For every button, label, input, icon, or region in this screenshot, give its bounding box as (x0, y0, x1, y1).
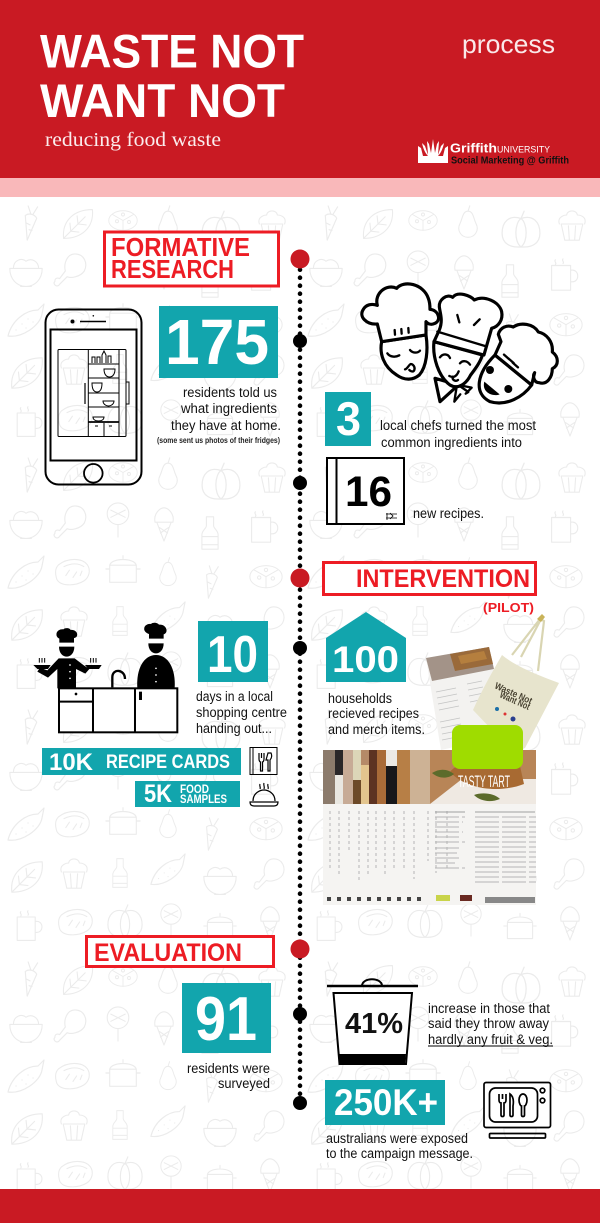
stat: 250K+ australians: 250K+ (334, 1082, 438, 1123)
heading: evaluation: EVALUATION (94, 939, 242, 967)
stat: 16 recipes book: new recipes. (413, 506, 484, 521)
icon: tv with cutlery (484, 1082, 550, 1138)
stat: 10 days: shopping centre (196, 705, 287, 720)
footer banner (0, 1189, 600, 1223)
recipe photo and sheet (323, 750, 536, 905)
stat: 10 days: 10 (207, 626, 258, 684)
header banner (0, 0, 600, 197)
merch photo: recipe card, tote bag, green board (323, 614, 559, 905)
icon: chefs at kitchen counter (33, 623, 177, 732)
tote bag: Waste Not (493, 681, 534, 707)
stat: 250K+ australians: to the campaign message. (326, 1146, 473, 1161)
stat: 3 chefs: local chefs turned the most (380, 418, 536, 433)
text: increase fruit and veg: hardly any fruit & veg. (428, 1032, 553, 1047)
text: increase fruit and veg (428, 1001, 553, 1047)
icon: house stat 100 households: 100 (332, 639, 399, 680)
stat: 175 residents: (some sent us photos of their fridges) (157, 436, 280, 445)
stat: 16 recipes book: 16 (345, 468, 392, 516)
stat: 91 residents: surveyed (218, 1076, 270, 1091)
logo: Griffith (450, 142, 497, 156)
logo (418, 139, 569, 166)
icon: phone with fridge (46, 310, 142, 484)
bar: 10K recipe cards: RECIPE CARDS (106, 751, 230, 773)
text: increase fruit and veg: said they throw away (428, 1016, 549, 1031)
stat: 3 chefs (325, 392, 536, 450)
stat: 175 residents: residents told us (183, 385, 277, 400)
stat: 3 chefs: 3 (336, 392, 361, 445)
green chopping board (452, 725, 523, 769)
stat: 250K+ australians (325, 1080, 473, 1161)
bar: 5K food samples: SAMPLES (180, 794, 227, 806)
stat: 175 residents: they have at home. (171, 418, 281, 433)
tote bag (473, 614, 559, 752)
icon: three chefs (362, 284, 557, 403)
bar: 5K food samples: 5K (144, 780, 172, 808)
stat: 175 residents: what ingredients (180, 401, 277, 416)
title: WANT NOT (40, 75, 285, 128)
stat: 91 residents (182, 983, 271, 1091)
tote bag: Want Not (498, 690, 532, 713)
stat: 91 residents: residents were (187, 1061, 270, 1076)
icon: house stat 100 households: recieved recipes (328, 706, 419, 721)
timeline (290, 250, 310, 1110)
bar: 5K food samples: FOOD (180, 784, 209, 796)
stat: 175 residents: 175 (165, 306, 269, 378)
heading: intervention (324, 562, 536, 615)
heading: formative research: FORMATIVE (111, 232, 250, 262)
stat: 10 days: days in a local (196, 689, 273, 704)
stat: 16 recipes book (327, 458, 484, 524)
stat: 3 chefs: common ingredients into (381, 435, 522, 450)
pilot tag: (PILOT) (483, 600, 534, 615)
icon: house stat 100 households: and merch items. (328, 722, 425, 737)
stat: 10 days: handing out... (196, 721, 272, 736)
recipe card (426, 647, 507, 750)
bar: 10K recipe cards (42, 748, 241, 776)
recipe photo and sheet: TASTY TART (458, 772, 510, 791)
stat: 10 days (196, 621, 287, 736)
bar: 5K food samples (135, 780, 240, 808)
icon: menu card (250, 748, 277, 774)
logo: Social Marketing @ Griffith (451, 156, 569, 166)
stat: 175 residents (157, 306, 281, 445)
stat: 250K+ australians: australians were exposed (326, 1131, 468, 1146)
icon: house stat 100 households (326, 612, 425, 737)
heading: intervention: INTERVENTION (356, 565, 530, 593)
heading: formative research (104, 232, 278, 286)
stat: 91 residents: 91 (195, 985, 257, 1054)
icon: hot dish (250, 783, 278, 806)
heading: formative research: RESEARCH (111, 254, 234, 284)
title: WASTE NOT (40, 26, 304, 78)
subtitle: reducing food waste (45, 130, 221, 151)
text: increase fruit and veg: increase in those that (428, 1001, 550, 1016)
logo: UNIVERSITY (497, 144, 550, 154)
icon: house stat 100 households: households (328, 691, 392, 706)
icon: bin with 41% (327, 979, 418, 1064)
title (40, 26, 304, 128)
process label: process (462, 29, 555, 59)
icon: bin with 41%: 41% (345, 1008, 403, 1040)
bar: 10K recipe cards: 10K (49, 749, 94, 776)
